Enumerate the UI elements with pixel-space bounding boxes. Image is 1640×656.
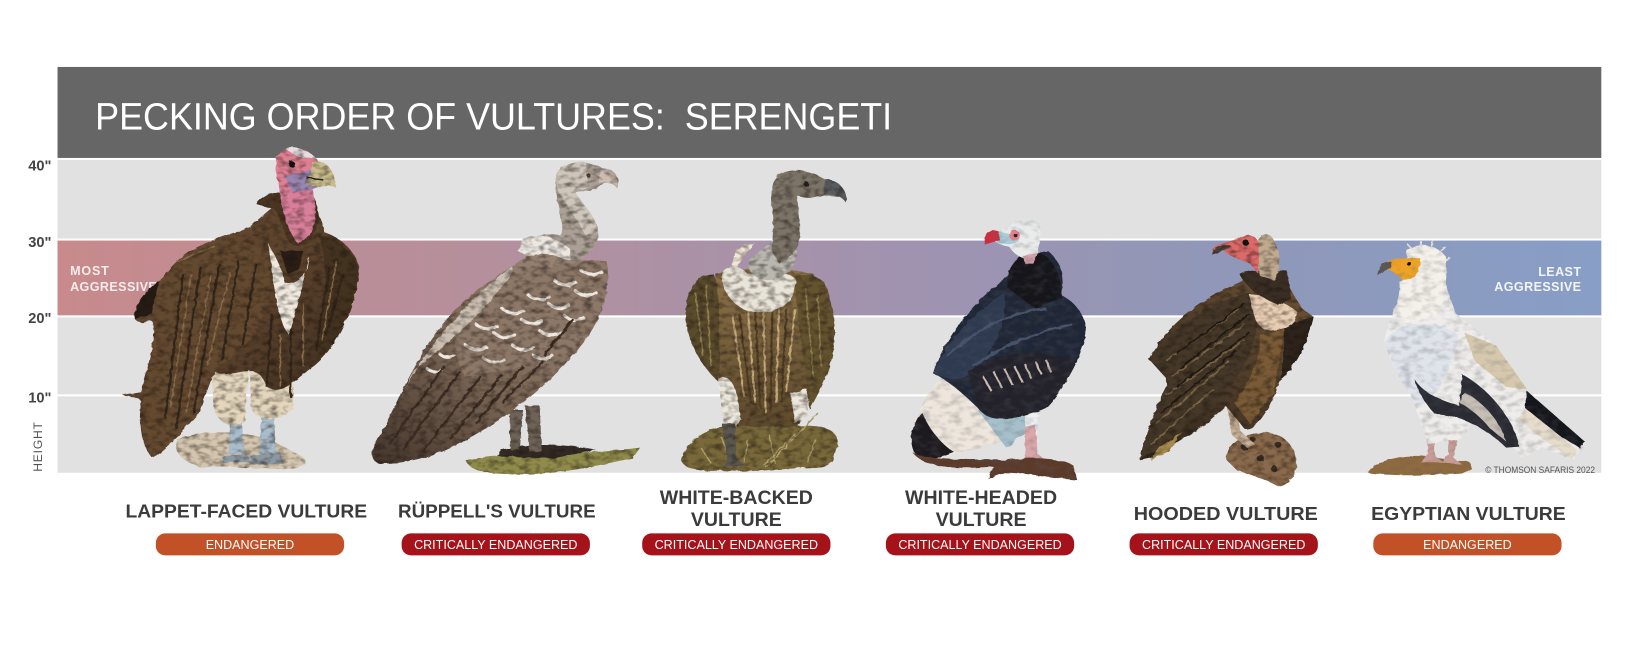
species: hooded vulture bbox=[1130, 503, 1318, 555]
species: white-headed vulture: WHITE-HEADED bbox=[905, 487, 1057, 509]
species: white-headed vulture: VULTURE bbox=[936, 509, 1027, 531]
species: white-backed vulture: WHITE-BACKED bbox=[660, 487, 813, 509]
vulture: lappet-faced bbox=[122, 147, 359, 469]
species: egyptian vulture bbox=[1371, 503, 1566, 555]
status pill: CRITICALLY ENDANGERED bbox=[414, 538, 577, 552]
height axis labels: 30" bbox=[28, 235, 51, 251]
status pill: CRITICALLY ENDANGERED bbox=[898, 538, 1062, 552]
height axis labels: 40" bbox=[28, 158, 51, 174]
height axis labels: HEIGHT bbox=[31, 421, 45, 472]
status pill: ENDANGERED bbox=[1423, 538, 1512, 552]
species: ruppell's vulture: RÜPPELL'S VULTURE bbox=[398, 501, 596, 522]
most aggressive label: MOST bbox=[70, 264, 110, 278]
title bar bbox=[58, 67, 1601, 158]
height axis labels: 10" bbox=[28, 391, 51, 407]
vulture: hooded bbox=[1140, 234, 1314, 486]
status pill bbox=[156, 533, 344, 555]
vulture: egyptian bbox=[1368, 241, 1585, 475]
status pill: CRITICALLY ENDANGERED bbox=[655, 538, 818, 552]
aggression gradient band bbox=[58, 240, 1601, 316]
vulture: white-backed bbox=[681, 170, 847, 471]
vulture: white-headed bbox=[911, 220, 1086, 480]
species: white-backed vulture bbox=[642, 487, 830, 555]
height axis labels: 20" bbox=[28, 311, 51, 327]
status pill bbox=[886, 533, 1074, 555]
species: egyptian vulture: EGYPTIAN VULTURE bbox=[1371, 503, 1566, 524]
least aggressive label: AGGRESSIVE bbox=[1494, 280, 1581, 294]
status pill bbox=[402, 533, 590, 555]
species: ruppell's vulture bbox=[398, 501, 596, 555]
status pill bbox=[1130, 533, 1318, 555]
most aggressive label: AGGRESSIVE bbox=[70, 280, 157, 294]
status pill: ENDANGERED bbox=[206, 538, 294, 552]
species: lappet-faced vulture: LAPPET-FACED VULTURE bbox=[126, 501, 367, 522]
species: hooded vulture: HOODED VULTURE bbox=[1134, 503, 1318, 524]
height axis labels bbox=[28, 158, 51, 472]
status pill bbox=[642, 533, 830, 555]
species: lappet-faced vulture bbox=[126, 501, 367, 555]
least aggressive label: LEAST bbox=[1538, 265, 1581, 279]
vulture: ruppell's bbox=[372, 162, 640, 474]
title: PECKING ORDER OF VULTURES: SERENGETI bbox=[95, 96, 892, 139]
status pill bbox=[1373, 533, 1562, 555]
species: white-backed vulture: VULTURE bbox=[691, 509, 782, 531]
species: white-headed vulture bbox=[886, 487, 1074, 555]
chart background bbox=[58, 158, 1601, 473]
status pill: CRITICALLY ENDANGERED bbox=[1142, 538, 1305, 552]
copyright: © THOMSON SAFARIS 2022 bbox=[1485, 465, 1595, 475]
